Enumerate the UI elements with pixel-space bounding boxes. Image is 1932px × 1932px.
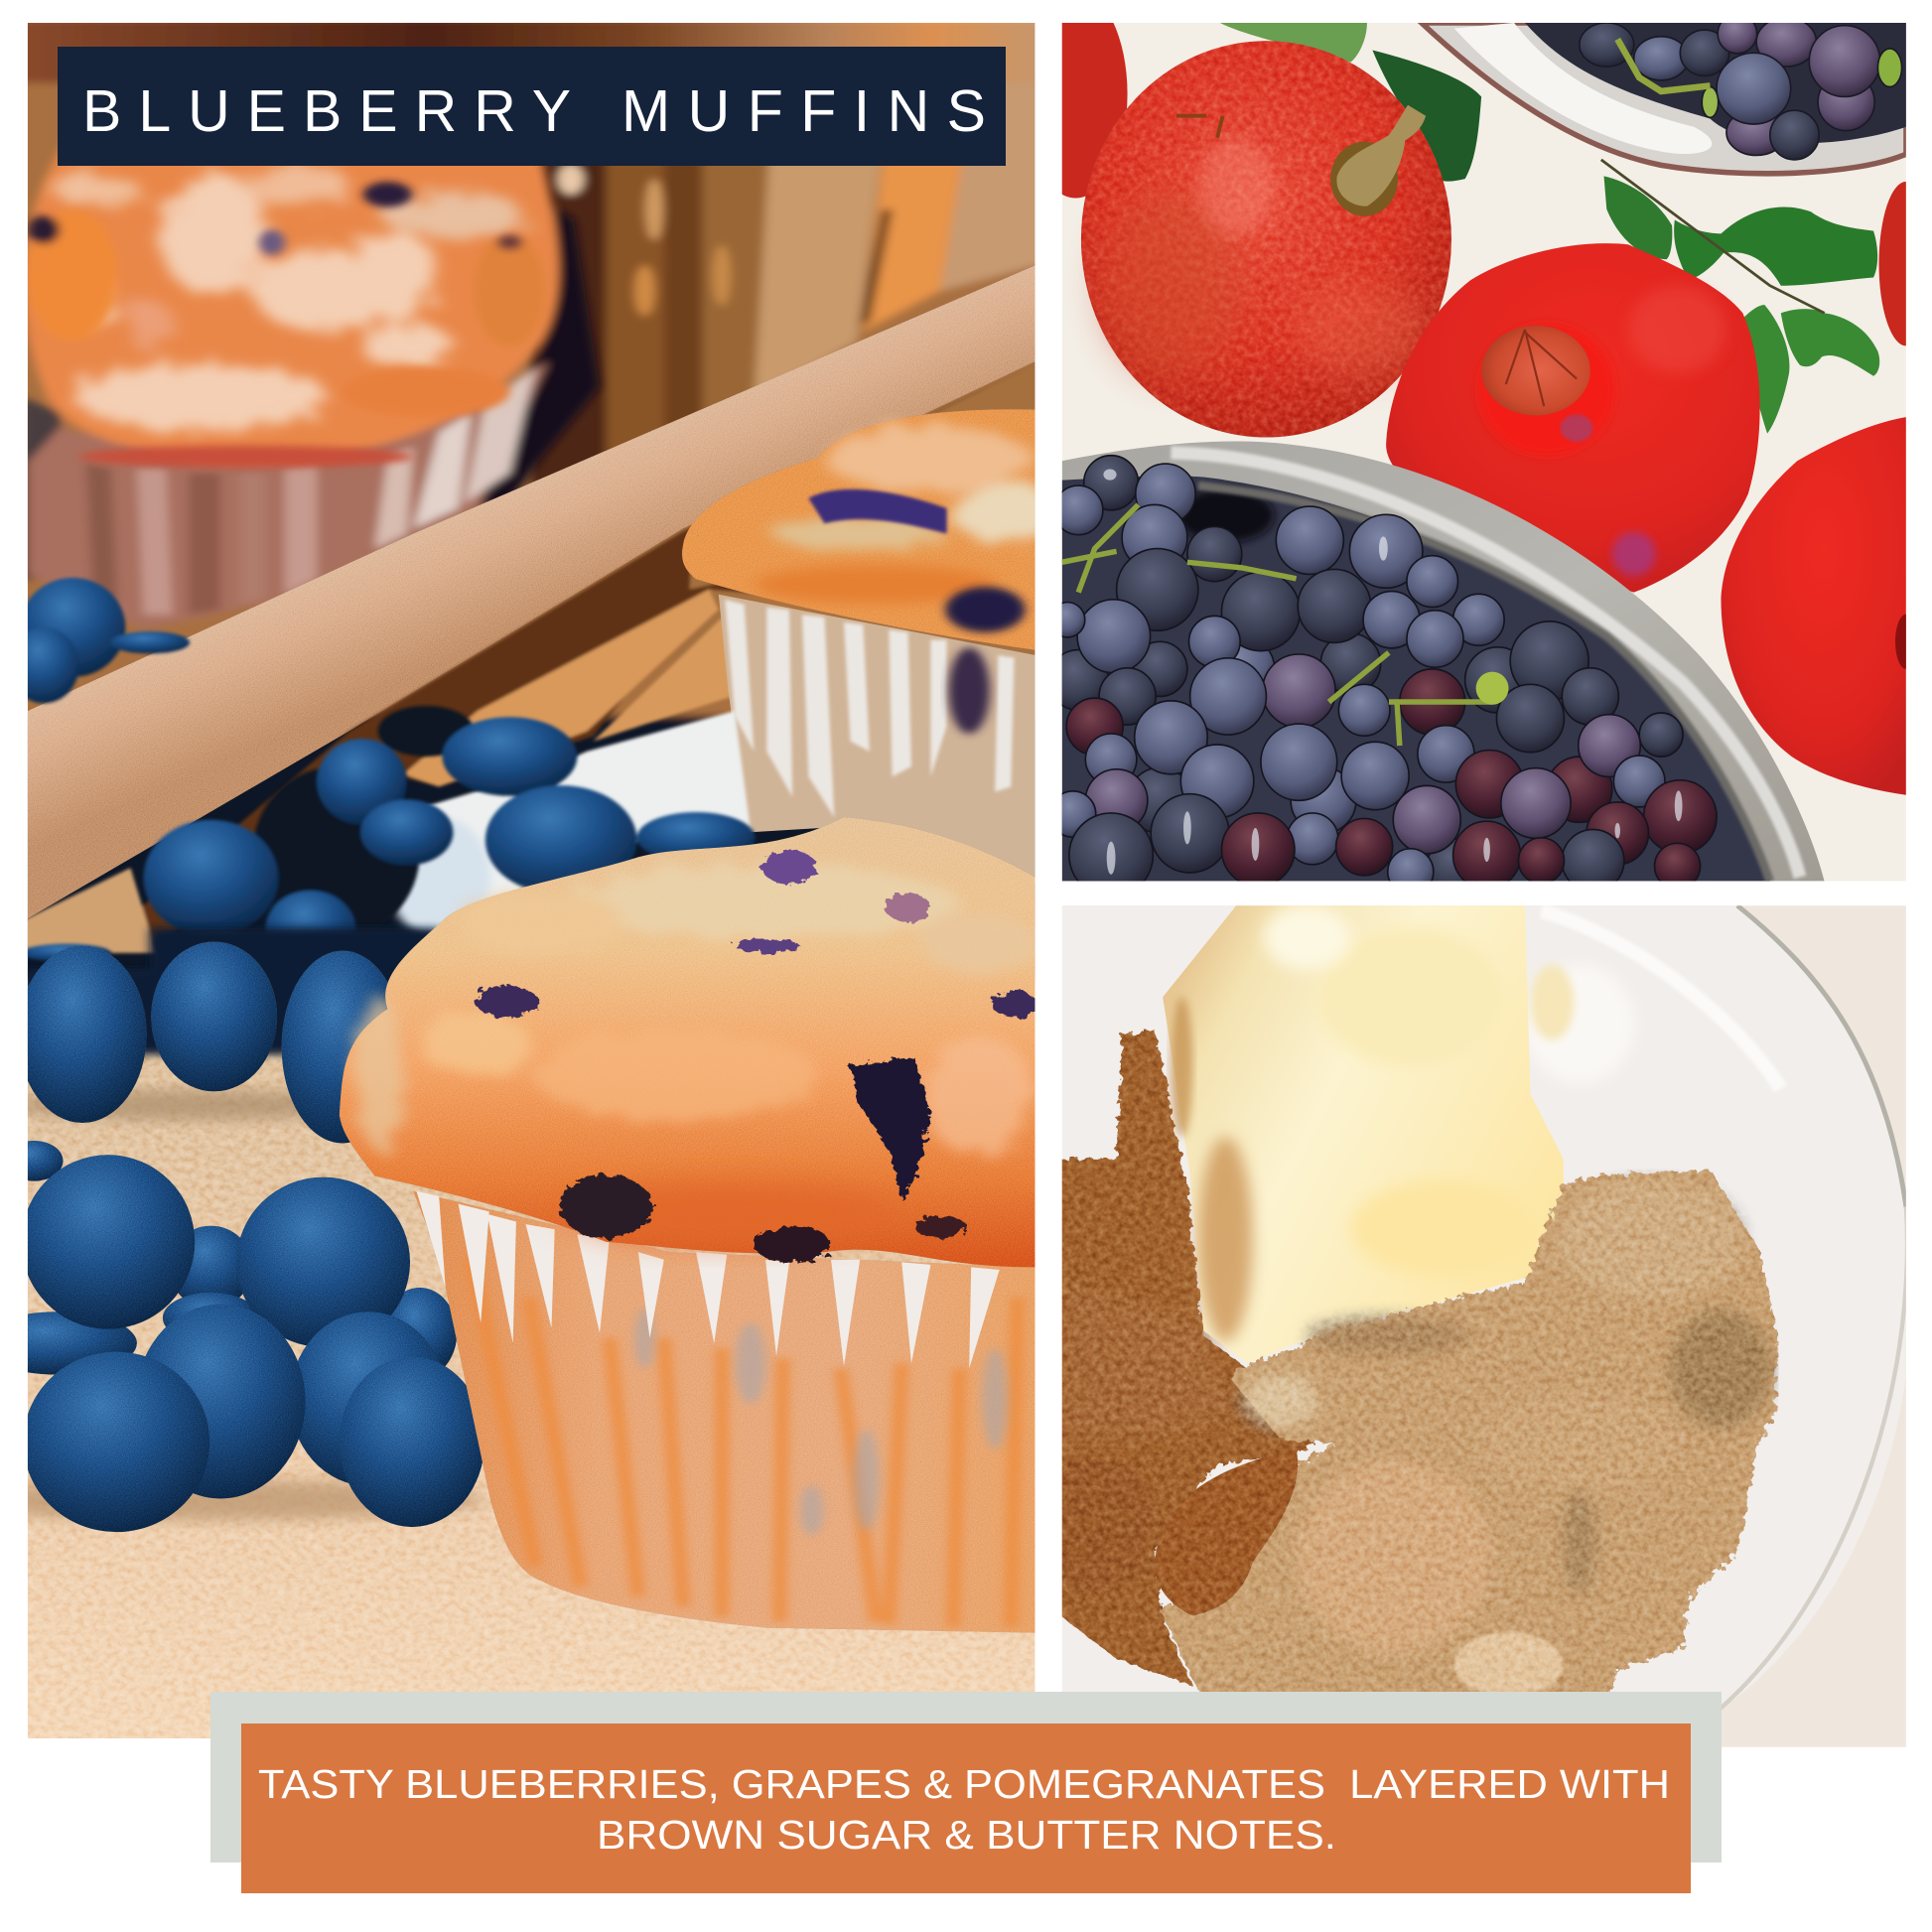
pomegranate right edge	[1879, 182, 1932, 345]
glass bowl	[1062, 905, 1911, 1713]
title banner	[58, 47, 1006, 166]
big muffin paper wrapper	[413, 1191, 1035, 1633]
shadow between berries	[21, 928, 439, 1054]
caption line 2: BROWN SUGAR & BUTTER NOTES.	[597, 1812, 1336, 1858]
big muffin dome	[340, 817, 1036, 1267]
white paper cup	[427, 709, 753, 900]
top grape bowl	[1422, 14, 1906, 174]
lower basket slats	[21, 364, 1035, 953]
grape highlights	[1103, 470, 1683, 875]
stick of butter	[1163, 905, 1566, 1363]
pomegranate with stem	[1081, 41, 1451, 438]
blurred blueberries	[9, 578, 756, 973]
cinnamon mound	[1155, 1449, 1298, 1616]
blurred back muffin	[21, 108, 600, 629]
grape stems	[1062, 504, 1492, 746]
basket background	[15, 17, 1056, 979]
caption line 1: TASTY BLUEBERRIES, GRAPES & POMEGRANATES LAYERED WITH	[258, 1761, 1670, 1807]
wooden spoon handle	[28, 265, 1035, 918]
large silver bowl	[1048, 441, 1825, 897]
grape cluster	[1048, 456, 1717, 897]
photo: pomegranates and grapes	[1062, 23, 1906, 882]
brown sugar	[1160, 1170, 1778, 1702]
table cloth	[28, 1049, 1035, 1738]
cinnamon powder	[1035, 1030, 1345, 1686]
caption backing panel	[210, 1692, 1722, 1863]
title text: BLUEBERRY	[82, 78, 571, 144]
caption panel	[241, 1724, 1691, 1893]
foreground blueberries	[0, 941, 484, 1532]
leaves and branch	[1220, 23, 1879, 434]
pomegranate left edge	[1024, 0, 1128, 198]
photo: butter, brown sugar and cinnamon	[1035, 905, 1911, 1750]
rear right muffin	[682, 409, 1069, 883]
pomegranate with crown	[1386, 243, 1760, 593]
photo: blueberry muffins	[0, 17, 1069, 1809]
title text: MUFFINS	[621, 78, 986, 144]
pomegranate right	[1721, 417, 1917, 795]
